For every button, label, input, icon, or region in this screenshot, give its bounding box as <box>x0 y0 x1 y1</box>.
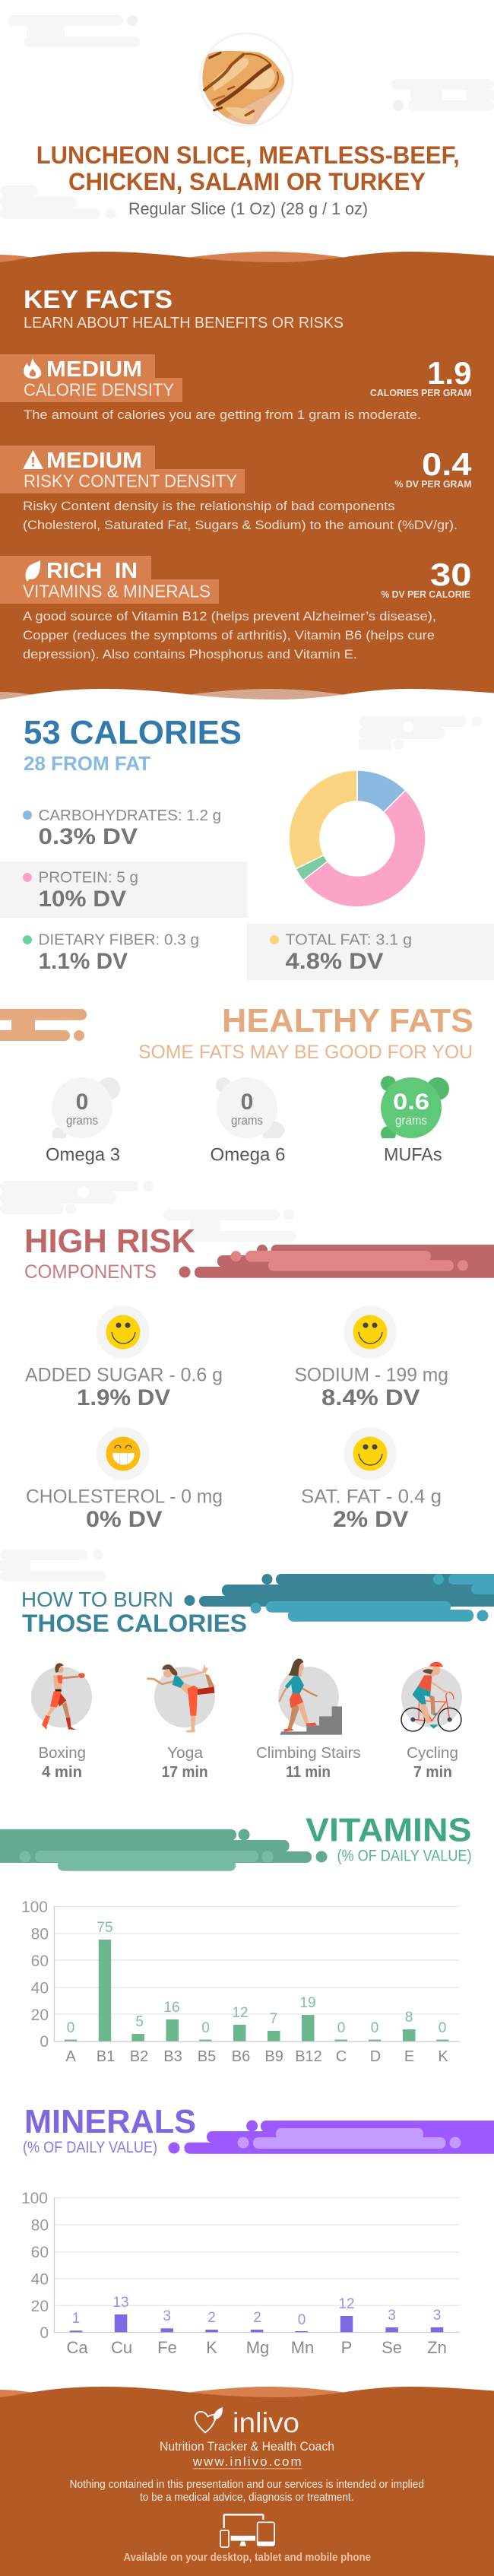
bar chart: vitamins: 12 <box>232 2005 249 2021</box>
legend: dietary fiber <box>23 932 199 974</box>
fact: risky content density: 0.4 <box>422 446 472 482</box>
subheading: calories from fat: 28 FROM FAT <box>24 753 150 775</box>
bar chart: vitamins: B2 <box>130 2048 148 2065</box>
subheading: healthy fats: SOME FATS MAY BE GOOD FOR YOU <box>138 1042 473 1063</box>
component: sodium <box>295 1305 448 1410</box>
bar chart: minerals: 13 <box>112 2295 129 2311</box>
stat: omega 3: Omega 3 <box>46 1145 120 1166</box>
bar chart: minerals: Se <box>382 2338 402 2357</box>
fact: risky content density: Risky Content density is the relationship of bad components <box>23 499 395 513</box>
bar chart: vitamins: B5 <box>198 2048 216 2065</box>
bar chart: vitamins: B9 <box>264 2048 283 2065</box>
bar chart: vitamins: A <box>65 2048 76 2065</box>
heading: those calories: THOSE CALORIES <box>22 1610 247 1637</box>
component: saturated fat: SAT. FAT - 0.4 g <box>301 1486 442 1508</box>
bar chart: minerals: 3 <box>433 2308 441 2324</box>
bar chart: vitamins: 5 <box>135 2014 144 2030</box>
bar chart: vitamins <box>21 1899 460 2065</box>
bar chart: minerals: Ca <box>66 2338 88 2357</box>
bar chart: minerals: 3 <box>163 2308 171 2324</box>
bar chart: minerals: P <box>341 2338 352 2357</box>
bar chart: vitamins: B3 <box>163 2048 182 2065</box>
heading: high risk: HIGH RISK <box>24 1223 196 1260</box>
panel: footer <box>0 2387 494 2576</box>
bar chart: vitamins: 0 <box>439 2020 446 2036</box>
component: added sugar: 1.9% DV <box>77 1385 170 1410</box>
panel: calories <box>0 715 494 980</box>
bar chart: vitamins: 20 <box>31 2007 49 2024</box>
bar chart: minerals: 1 <box>72 2311 80 2327</box>
label: boxing: Boxing <box>38 1745 86 1762</box>
icon: leaf <box>26 560 40 582</box>
legend: carbohydrates: CARBOHYDRATES: 1.2 g <box>38 807 221 824</box>
label: yoga <box>162 1745 208 1781</box>
panel: minerals <box>21 2103 494 2357</box>
bar chart: minerals: Mn <box>291 2338 314 2357</box>
bar chart: vitamins: 0 <box>371 2020 378 2036</box>
exercise: boxing <box>31 1663 92 1730</box>
component: cholesterol: 0% DV <box>86 1507 163 1532</box>
stat: MUFAs: MUFAs <box>384 1145 442 1166</box>
stat: omega 6: 0 <box>241 1090 253 1115</box>
fact: calorie density: 1.9 <box>427 355 471 391</box>
exercise: yoga <box>147 1664 215 1732</box>
heading: calories: 53 CALORIES <box>24 715 242 751</box>
decorative bar: vitamins <box>0 1829 327 1871</box>
icon: desktop, tablet and phone <box>220 2514 274 2547</box>
legend: protein: PROTEIN: 5 g <box>38 870 138 887</box>
fact: risky content density: RISKY CONTENT DENSITY <box>24 471 237 491</box>
bar chart: vitamins: E <box>404 2048 414 2065</box>
fact: calorie density: MEDIUM <box>46 357 142 382</box>
bar chart: vitamins: 60 <box>31 1953 49 1970</box>
website link: www.inlivo.com <box>192 2454 302 2469</box>
legend: protein <box>23 870 138 912</box>
label: climbing stairs: Climbing Stairs <box>256 1745 361 1762</box>
bar chart: vitamins: D <box>370 2048 381 2065</box>
title <box>36 141 460 195</box>
fact: risky content density <box>0 446 472 532</box>
bar chart: minerals: Mg <box>246 2338 269 2357</box>
label: yoga: 17 min <box>162 1764 208 1781</box>
fact: rich in vitamins and minerals: depression). Also contains Phosphorus and Vitamin E. <box>23 647 357 661</box>
bar chart: vitamins: 80 <box>31 1926 49 1943</box>
title: LUNCHEON SLICE, MEATLESS-BEEF, <box>36 141 460 169</box>
stat: omega 3 <box>46 1077 120 1166</box>
bar chart: minerals: 0 <box>40 2324 49 2342</box>
panel: high risk components <box>24 1223 494 1532</box>
subheading: minerals: (% OF DAILY VALUE) <box>23 2139 157 2156</box>
stat: MUFAs: grams <box>395 1113 427 1128</box>
exercise: climbing stairs <box>278 1658 342 1735</box>
availability note: Available on your desktop, tablet and mobile phone <box>123 2551 371 2564</box>
label: boxing <box>38 1745 86 1781</box>
stat: omega 6 <box>210 1077 286 1166</box>
bar chart: minerals: 60 <box>31 2244 49 2261</box>
legend: total fat: TOTAL FAT: 3.1 g <box>286 932 412 949</box>
legend: carbohydrates <box>23 807 221 849</box>
subheading: key facts: LEARN ABOUT HEALTH BENEFITS OR RISKS <box>24 315 344 332</box>
stat: omega 6: grams <box>231 1113 263 1128</box>
legend: total fat: 4.8% DV <box>286 949 383 974</box>
bar chart: vitamins: 100 <box>21 1899 48 1916</box>
fact: rich in vitamins and minerals: % DV PER CALORIE <box>382 589 470 600</box>
legend: dietary fiber: 1.1% DV <box>38 949 128 974</box>
decorative bar: minerals <box>169 2120 494 2154</box>
bar chart: vitamins: 75 <box>97 1920 113 1936</box>
component: cholesterol: CHOLESTEROL - 0 mg <box>26 1486 223 1508</box>
bar chart: vitamins: C <box>336 2048 347 2065</box>
donut chart <box>289 770 426 907</box>
stat: omega 3: grams <box>66 1113 98 1128</box>
component: saturated fat <box>301 1427 442 1532</box>
fact: calorie density: The amount of calories you are getting from 1 gram is moderate. <box>24 408 421 422</box>
label: cycling: Cycling <box>407 1745 458 1762</box>
heading: how to burn: HOW TO BURN <box>21 1588 173 1611</box>
bar chart: vitamins: 7 <box>270 2011 277 2027</box>
stat: MUFAs: 0.6 <box>393 1090 429 1115</box>
fact: rich in vitamins and minerals <box>0 556 471 661</box>
bar chart: minerals: 20 <box>31 2298 49 2315</box>
panel: vitamins <box>0 1813 471 2065</box>
icon: food plate with grilled slice <box>200 33 293 126</box>
bar chart: vitamins: 8 <box>405 2010 413 2026</box>
logo: inlivo: inlivo <box>233 2407 299 2438</box>
legend: dietary fiber: DIETARY FIBER: 0.3 g <box>38 932 199 949</box>
stat: omega 6: Omega 6 <box>210 1145 286 1166</box>
decorative bar: burn calories <box>184 1574 494 1622</box>
component: cholesterol <box>26 1427 223 1532</box>
bar chart: minerals: 80 <box>31 2217 49 2234</box>
bar chart: minerals: 100 <box>21 2190 48 2207</box>
heading: key facts: KEY FACTS <box>24 285 173 313</box>
bar chart: vitamins: 16 <box>163 2000 180 2016</box>
subheading: vitamins: (% OF DAILY VALUE) <box>337 1848 471 1865</box>
legend: carbohydrates: 0.3% DV <box>38 824 138 849</box>
icon: flame <box>24 358 41 379</box>
fact: calorie density: CALORIE DENSITY <box>24 380 174 400</box>
bar chart: minerals <box>21 2190 460 2357</box>
panel: key facts <box>0 252 494 715</box>
fact: rich in vitamins and minerals: VITAMINS & MINERALS <box>23 582 211 601</box>
fact: risky content density: MEDIUM <box>46 449 142 473</box>
label: climbing stairs: 11 min <box>286 1764 331 1781</box>
bar chart: vitamins: B12 <box>295 2048 322 2065</box>
exercise: cycling <box>401 1662 462 1731</box>
bar chart: minerals: Zn <box>427 2338 447 2357</box>
label: yoga: Yoga <box>167 1745 204 1762</box>
fact: risky content density: % DV PER GRAM <box>395 479 471 490</box>
bar chart: minerals: 0 <box>298 2312 306 2328</box>
component: added sugar <box>25 1305 223 1410</box>
component: sodium: 8.4% DV <box>321 1385 420 1410</box>
serving size subtitle: Regular Slice (1 Oz) (28 g / 1 oz) <box>128 199 368 218</box>
heading: minerals: MINERALS <box>24 2103 196 2140</box>
bar chart: vitamins: B1 <box>97 2048 115 2065</box>
bar chart: vitamins: 0 <box>67 2020 74 2036</box>
disclaimer: to be a medical advice, diagnosis or treatment. <box>140 2492 354 2504</box>
bar chart: minerals: 12 <box>338 2296 355 2312</box>
fact: rich in vitamins and minerals: RICH IN <box>46 559 138 583</box>
stat: omega 3: 0 <box>76 1090 88 1115</box>
fact: calorie density <box>0 354 471 422</box>
component: saturated fat: 2% DV <box>333 1507 409 1532</box>
icon: warning triangle <box>23 450 43 469</box>
panel: how to burn those calories <box>21 1574 494 1781</box>
stat: MUFAs <box>381 1076 449 1166</box>
bar chart: vitamins: 19 <box>299 1995 316 2011</box>
panel: healthy fats <box>0 1003 473 1166</box>
label: climbing stairs <box>256 1745 361 1781</box>
bar chart: minerals: Fe <box>157 2338 177 2357</box>
bar chart: minerals: 3 <box>388 2308 396 2324</box>
fact: rich in vitamins and minerals: A good source of Vitamin B12 (helps prevent Alzheimer’s disease), <box>23 609 436 623</box>
bar chart: minerals: Cu <box>111 2338 132 2357</box>
subheading: components: COMPONENTS <box>24 1261 157 1283</box>
fact: risky content density: (Cholesterol, Saturated Fat, Sugars & Sodium) to the amount (%DV/gr). <box>23 518 458 532</box>
heading: healthy fats: HEALTHY FATS <box>222 1003 473 1039</box>
legend: protein: 10% DV <box>38 887 126 912</box>
component: added sugar: ADDED SUGAR - 0.6 g <box>25 1365 223 1386</box>
label: cycling <box>407 1745 458 1781</box>
disclaimer <box>70 2479 424 2504</box>
decorative bar: high risk <box>179 1245 494 1278</box>
label: boxing: 4 min <box>42 1764 82 1781</box>
fact: rich in vitamins and minerals: 30 <box>430 557 471 592</box>
fact: rich in vitamins and minerals: Copper (reduces the symptoms of arthritis), Vitamin B6 (helps cure <box>23 628 435 642</box>
fact: calorie density: CALORIES PER GRAM <box>370 388 471 398</box>
bar chart: vitamins: 40 <box>31 1980 49 1997</box>
bar chart: vitamins: K <box>438 2048 448 2065</box>
bar chart: vitamins: 0 <box>201 2020 210 2036</box>
bar chart: vitamins: B6 <box>232 2048 250 2065</box>
component: sodium: SODIUM - 199 mg <box>295 1365 448 1386</box>
disclaimer: Nothing contained in this presentation and our services is intended or implied <box>70 2479 424 2491</box>
logo: inlivo <box>195 2407 299 2438</box>
heading: vitamins: VITAMINS <box>306 1813 471 1849</box>
bar chart: minerals: 40 <box>31 2270 49 2289</box>
bar chart: minerals: 2 <box>253 2310 261 2326</box>
bar chart: minerals: 2 <box>207 2310 216 2326</box>
tagline: Nutrition Tracker & Health Coach <box>160 2439 334 2454</box>
title: CHICKEN, SALAMI OR TURKEY <box>68 168 426 195</box>
legend: total fat <box>270 932 412 974</box>
decorative bar: healthy fats <box>0 1009 87 1041</box>
bar chart: vitamins: 0 <box>40 2033 49 2051</box>
label: cycling: 7 min <box>413 1764 452 1781</box>
bar chart: vitamins: 0 <box>337 2020 345 2036</box>
bar chart: minerals: K <box>206 2338 217 2357</box>
